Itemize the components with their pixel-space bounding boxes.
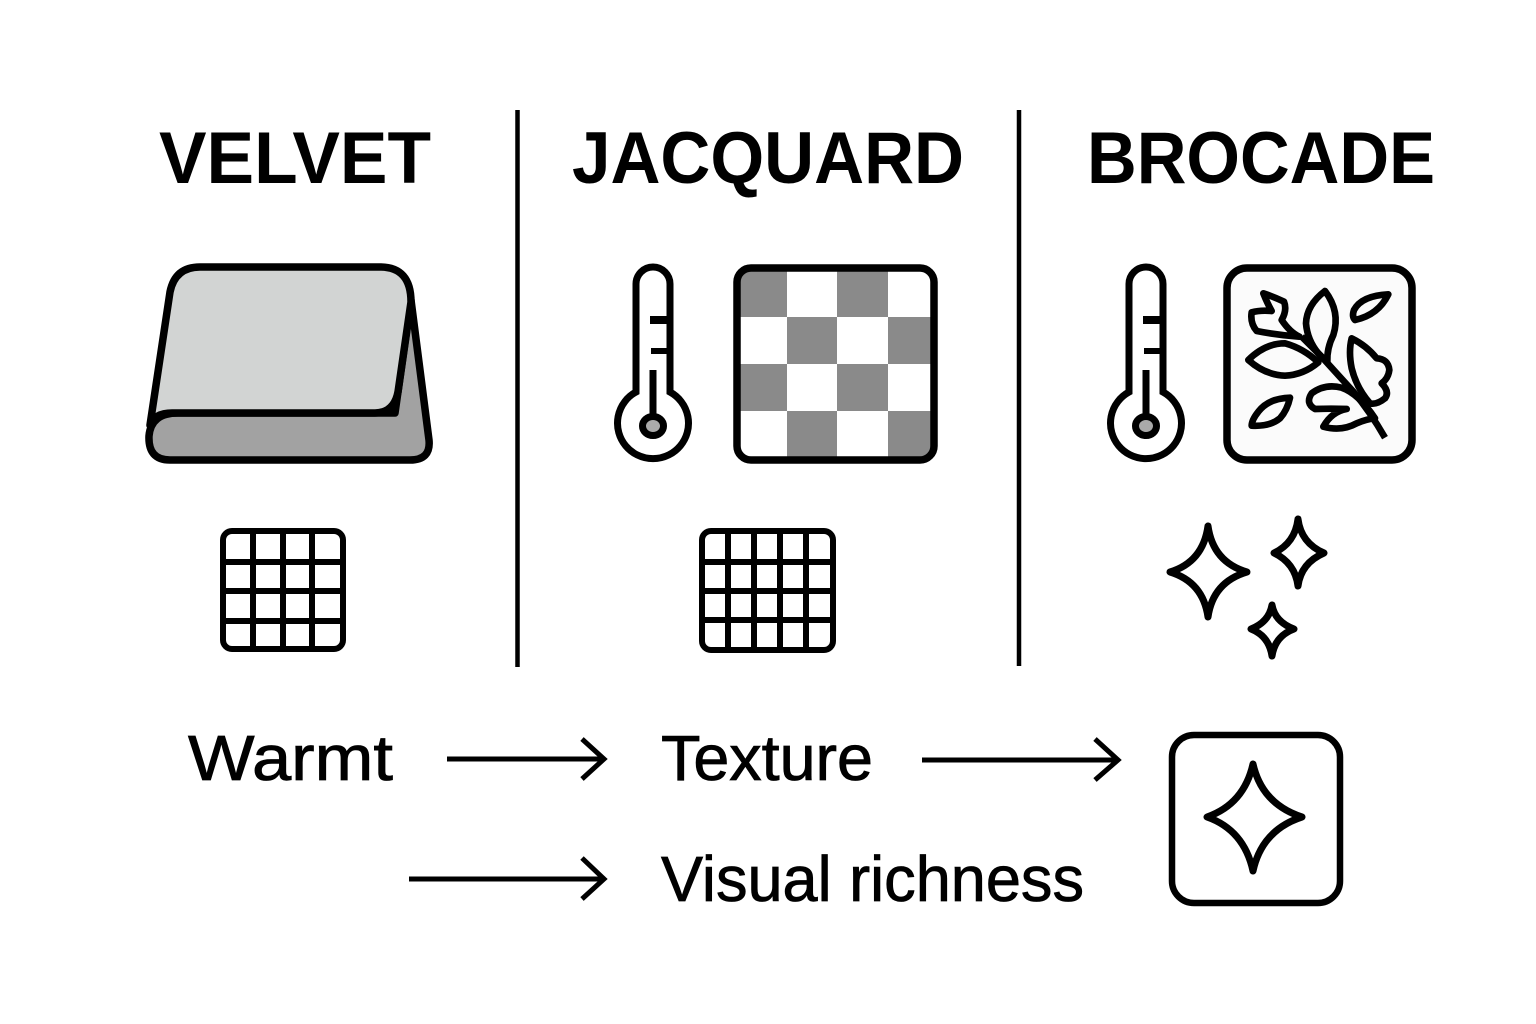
- label: visual richness: Visual richness: [661, 843, 1084, 915]
- heading: jacquard: JACQUARD: [572, 118, 964, 199]
- icon: jacquard thermometer: [618, 267, 688, 459]
- arrow: warmth to texture: [447, 739, 604, 779]
- icon: jacquard checker swatch: [737, 268, 934, 460]
- icon: velvet fabric fold: [149, 267, 429, 460]
- icon: brocade floral swatch: [1227, 268, 1412, 460]
- label: texture: Texture: [661, 722, 873, 794]
- arrow: to visual richness: [409, 858, 604, 899]
- icon: sparkles: [1170, 519, 1324, 656]
- icon: jacquard grid: [702, 531, 833, 650]
- arrow: texture to result: [922, 739, 1118, 780]
- heading: brocade: BROCADE: [1087, 118, 1435, 199]
- label: warmth: Warmt: [188, 722, 393, 794]
- icon: result sparkle box: [1172, 735, 1340, 903]
- heading: velvet: VELVET: [159, 118, 431, 199]
- icon: velvet grid: [223, 531, 343, 649]
- icon: brocade thermometer: [1110, 267, 1182, 459]
